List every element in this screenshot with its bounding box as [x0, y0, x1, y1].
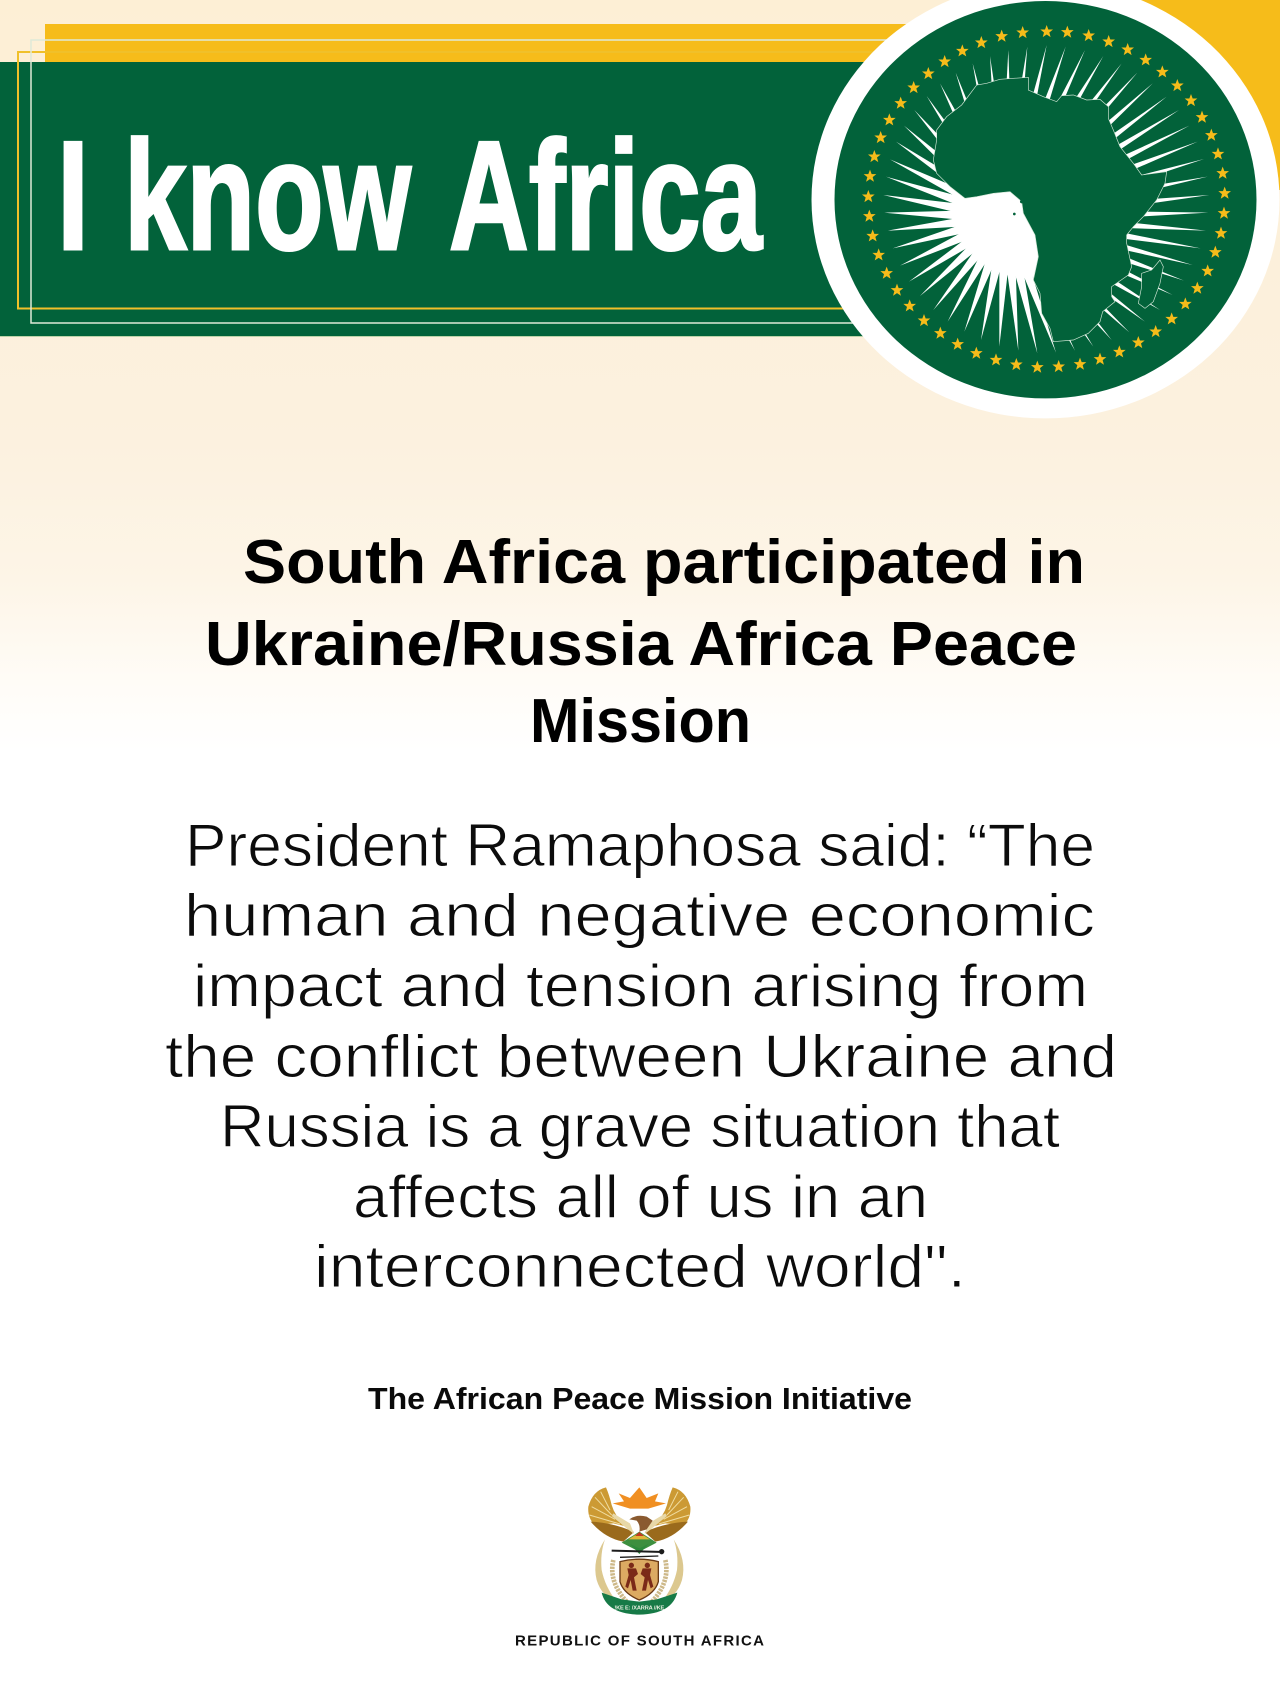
quote body text — [165, 812, 1117, 1300]
coat of arms of South Africa — [588, 1487, 690, 1615]
sun rays — [883, 45, 1209, 353]
African Union seal — [812, 0, 1280, 418]
quote body text: the conflict between Ukraine and — [165, 1023, 1117, 1090]
map of Africa — [933, 77, 1167, 342]
subheading: The African Peace Mission Initiative — [368, 1381, 912, 1416]
banner title: I — [57, 109, 89, 282]
ring of stars — [862, 25, 1231, 373]
quote body text: interconnected world". — [314, 1233, 966, 1300]
heading: Mission — [530, 687, 751, 756]
heading: Ukraine/Russia Africa Peace — [205, 610, 1077, 679]
heading: South Africa participated in — [243, 528, 1085, 597]
quote body text: human and negative economic — [184, 882, 1095, 949]
banner title: Africa — [449, 109, 763, 282]
quote body text: impact and tension arising from — [193, 953, 1088, 1020]
heading — [205, 528, 1085, 756]
quote body text: affects all of us in an — [353, 1164, 928, 1230]
Madagascar — [1138, 260, 1163, 308]
quote body text: Russia is a grave situation that — [220, 1093, 1060, 1160]
coat of arms caption: REPUBLIC OF SOUTH AFRICA — [515, 1632, 764, 1650]
banner title — [57, 109, 763, 282]
header banner — [0, 0, 1280, 337]
coat of arms of South Africa: !KE E: /XARRA //KE — [614, 1606, 665, 1612]
banner title: know — [124, 109, 411, 282]
quote body text: President Ramaphosa said: “The — [185, 812, 1095, 879]
